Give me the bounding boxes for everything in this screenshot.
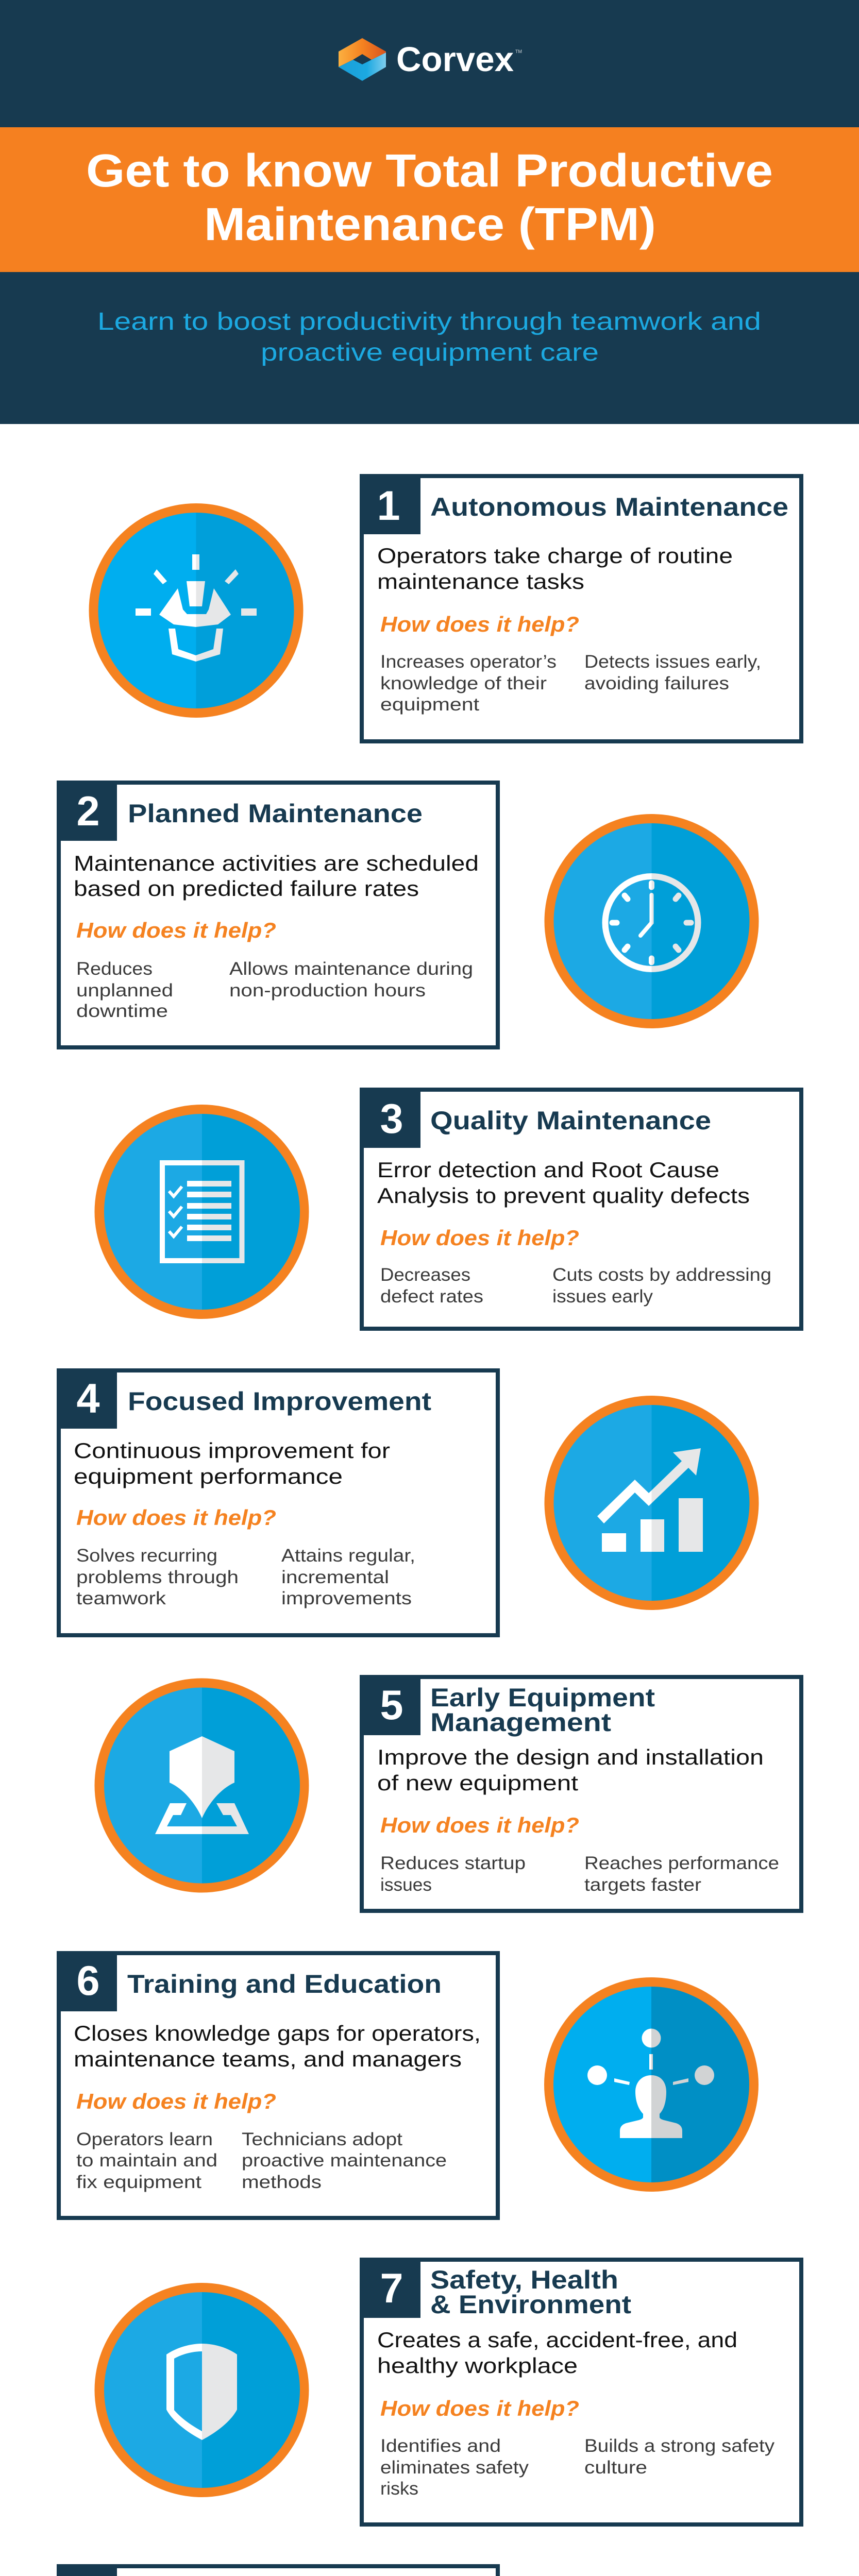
number box 2 — [57, 781, 117, 841]
benefit 1: knowledge of their — [380, 673, 547, 693]
panel: 2 Planned Maintenance — [57, 781, 498, 1047]
logo: Corvex — [339, 38, 522, 81]
number box 4 — [57, 1368, 117, 1429]
description — [377, 2328, 737, 2378]
benefit 2: Builds a strong safety — [584, 2436, 775, 2456]
card frame — [59, 2566, 498, 2576]
benefit 1: Increases operator’s — [380, 652, 557, 672]
benefit 2: Allows maintenance during — [229, 959, 473, 979]
benefit 1: fix equipment — [76, 2172, 201, 2192]
benefit 1 — [76, 2129, 217, 2192]
number box 3: 3 — [380, 1096, 403, 1142]
icon: equipment design badge — [95, 1679, 309, 1893]
card title: Management — [430, 1708, 611, 1737]
subheading: How does it help? — [76, 1505, 276, 1530]
card title: Early Equipment — [430, 1683, 655, 1712]
subheading: How does it help? — [380, 612, 579, 636]
benefit 2 — [281, 1546, 415, 1608]
benefit 1: Solves recurring — [76, 1546, 217, 1566]
card title: Training and Education — [127, 1970, 442, 1998]
benefit 2 — [584, 2436, 775, 2478]
benefit 1 — [380, 2436, 529, 2499]
benefit 1: downtime — [76, 1001, 168, 1021]
benefit 1: unplanned — [76, 980, 173, 1001]
benefit 1: Reduces — [76, 959, 153, 979]
benefit 2: Detects issues early, — [584, 652, 761, 672]
benefit 1: to maintain and — [76, 2150, 217, 2171]
number box 2: 2 — [76, 788, 100, 835]
benefit 2: methods — [242, 2172, 322, 2192]
description: healthy workplace — [377, 2353, 578, 2378]
subheading: How does it help? — [380, 2396, 579, 2420]
benefit 1: equipment — [380, 694, 479, 715]
benefit 1: Reduces startup — [380, 1853, 526, 1873]
card title: Autonomous Maintenance — [430, 493, 788, 521]
description — [377, 1745, 764, 1795]
number box 6 — [57, 1951, 117, 2011]
description: of new equipment — [377, 1771, 578, 1795]
number box 1: 1 — [377, 483, 400, 529]
benefit 1: teamwork — [76, 1588, 166, 1608]
icon: checklist badge — [95, 1105, 309, 1319]
subtitle: proactive equipment care — [261, 339, 599, 366]
panel: 6 Training and Education — [57, 1951, 498, 2218]
panel: 5 Early Equipment Management — [360, 1675, 801, 1911]
description: based on predicted failure rates — [74, 876, 419, 901]
benefit 2: avoiding failures — [584, 673, 729, 693]
card frame — [362, 1090, 801, 1329]
benefit 2: Technicians adopt — [242, 2129, 402, 2149]
number box 1 — [360, 474, 420, 534]
description: maintenance tasks — [377, 569, 584, 594]
panel: 3 Quality Maintenance — [360, 1088, 801, 1329]
card title — [430, 2265, 631, 2319]
benefit 2: incremental — [281, 1567, 389, 1587]
description: Continuous improvement for — [74, 1438, 390, 1463]
subtitle — [97, 308, 761, 366]
description: Operators take charge of routine — [377, 544, 733, 568]
benefit 1: eliminates safety — [380, 2458, 529, 2478]
benefit 1 — [380, 1853, 526, 1895]
benefit 2: non-production hours — [229, 980, 426, 1001]
benefit 2: issues early — [552, 1286, 653, 1307]
logo: Corvex: TM — [515, 49, 522, 54]
number box 5 — [360, 1675, 420, 1735]
number box 6: 6 — [76, 1958, 100, 2004]
number box 5: 5 — [380, 1682, 403, 1728]
panel: 1 Autonomous Maintenance — [360, 474, 801, 741]
benefit 1: defect rates — [380, 1286, 483, 1307]
subtitle: Learn to boost productivity through teamwork and — [97, 308, 761, 335]
card title — [430, 1683, 655, 1737]
icon: person network badge — [544, 1977, 759, 2192]
subheading: How does it help? — [76, 2089, 276, 2113]
benefit 2 — [242, 2129, 447, 2192]
benefit 2: culture — [584, 2458, 647, 2478]
benefit 2 — [584, 652, 761, 693]
description — [377, 1158, 750, 1208]
card frame — [362, 2260, 801, 2524]
title: Maintenance (TPM) — [204, 199, 656, 250]
benefit 1 — [380, 1265, 483, 1307]
description — [377, 544, 733, 594]
title: Get to know Total Productive — [86, 145, 773, 197]
description — [74, 851, 479, 901]
benefit 1: problems through — [76, 1567, 239, 1587]
benefit 1: Decreases — [380, 1265, 470, 1285]
logo: Corvex: Corvex — [396, 40, 514, 79]
card frame — [59, 1953, 498, 2218]
benefit 2 — [229, 959, 473, 1001]
subheading: How does it help? — [380, 1813, 579, 1837]
benefit 2: Attains regular, — [281, 1546, 415, 1566]
description: Maintenance activities are scheduled — [74, 851, 479, 875]
subheading: How does it help? — [380, 1226, 579, 1250]
benefit 2: Cuts costs by addressing — [552, 1265, 771, 1285]
benefit 2: proactive maintenance — [242, 2150, 447, 2171]
card frame — [59, 1370, 498, 1635]
description: Closes knowledge gaps for operators, — [74, 2021, 481, 2045]
description: Improve the design and installation — [377, 1745, 764, 1769]
benefit 2: improvements — [281, 1588, 412, 1608]
card title: Planned Maintenance — [128, 799, 423, 828]
card title: & Environment — [430, 2290, 631, 2319]
description — [74, 1438, 390, 1488]
description: Creates a safe, accident-free, and — [377, 2328, 737, 2352]
card frame — [59, 783, 498, 1047]
card title: Quality Maintenance — [430, 1106, 711, 1135]
description: equipment performance — [74, 1464, 343, 1488]
panel: 4 Focused Improvement — [57, 1368, 498, 1635]
panel: 7 Safety, Health & Environment — [360, 2258, 801, 2524]
title — [86, 145, 773, 250]
number box 7: 7 — [380, 2265, 403, 2312]
number box 3 — [360, 1088, 420, 1148]
description: Error detection and Root Cause — [377, 1158, 719, 1182]
benefit 1: risks — [380, 2479, 418, 2499]
benefit 1: Operators learn — [76, 2129, 213, 2149]
subheading: How does it help? — [76, 918, 276, 942]
number box 4: 4 — [76, 1376, 100, 1422]
description: Analysis to prevent quality defects — [377, 1183, 750, 1208]
icon: growth chart badge — [544, 1396, 759, 1610]
card frame — [362, 476, 801, 741]
benefit 1 — [76, 959, 173, 1021]
icon: clock badge — [544, 814, 759, 1028]
benefit 2: Reaches performance — [584, 1853, 779, 1873]
card frame — [362, 1677, 801, 1911]
icon: shield badge — [95, 2283, 309, 2497]
description: maintenance teams, and managers — [74, 2047, 462, 2071]
benefit 2: targets faster — [584, 1875, 701, 1895]
number box 8 — [57, 2564, 117, 2576]
card title: Focused Improvement — [128, 1387, 431, 1416]
title band — [0, 127, 859, 272]
icon: worker helmet badge — [89, 503, 303, 718]
panel: 8 TPM in Administration — [57, 2564, 498, 2576]
benefit 2 — [584, 1853, 779, 1895]
benefit 1: Identifies and — [380, 2436, 501, 2456]
benefit 2 — [552, 1265, 771, 1307]
description — [74, 2021, 481, 2071]
benefit 1 — [380, 652, 557, 715]
benefit 1 — [76, 1546, 239, 1608]
subtitle band — [0, 272, 859, 424]
number box 7 — [360, 2258, 420, 2318]
benefit 1: issues — [380, 1875, 432, 1895]
header band: logo — [0, 0, 859, 127]
card title: Safety, Health — [430, 2265, 618, 2294]
